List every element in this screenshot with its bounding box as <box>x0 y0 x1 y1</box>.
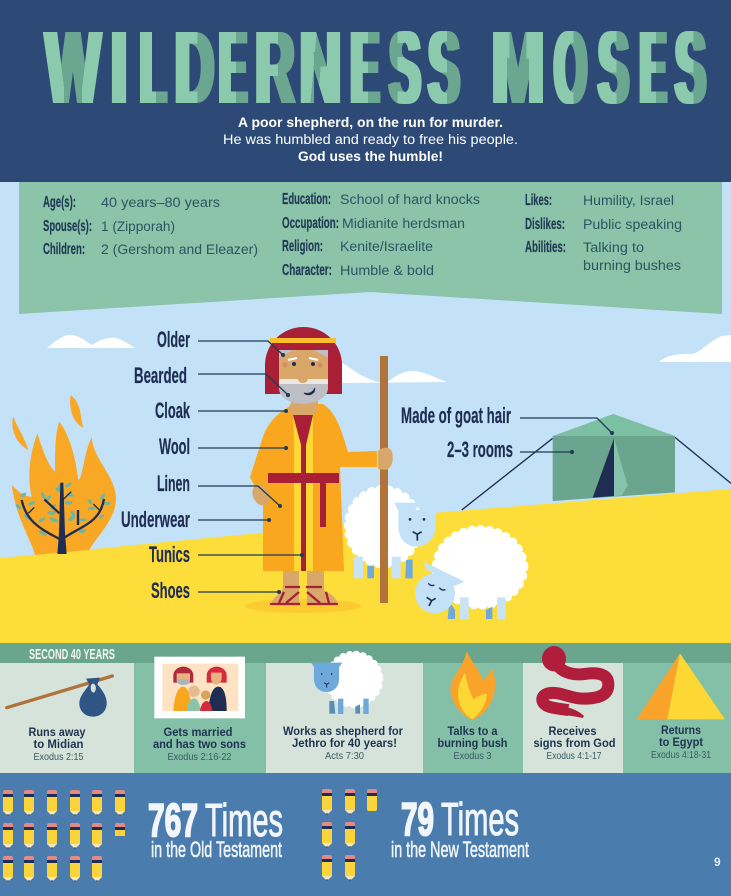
title: D <box>175 11 214 126</box>
callout labels: Moses: Underwear <box>121 507 190 532</box>
event caption: runs away <box>28 725 86 763</box>
sandals <box>270 587 338 604</box>
stat: 767 times: in the Old Testament <box>151 837 282 862</box>
callout labels: Moses: Wool <box>159 434 190 459</box>
Moses figure <box>245 327 393 613</box>
stat: 767 times: 767 <box>148 794 198 846</box>
info panel: Humble & bold <box>340 263 434 278</box>
icon: flame <box>450 651 495 720</box>
callout labels: tent: Made of goat hair <box>401 403 511 428</box>
event caption: runs away: to Midian <box>34 737 84 751</box>
event caption: runs away: Exodus 2:15 <box>34 751 84 763</box>
title: S <box>675 10 706 125</box>
event caption: returns: to Egypt <box>659 735 703 749</box>
robe <box>250 404 377 571</box>
event caption: shepherd: Acts 7:30 <box>325 750 364 762</box>
event caption: signs <box>534 724 616 762</box>
info panel: Children: <box>43 241 85 258</box>
pencils: Old Testament <box>3 790 125 882</box>
info panel: Education: <box>282 191 331 208</box>
callout labels: Moses: Older <box>157 327 190 352</box>
icon: sheep <box>311 655 379 714</box>
info panel <box>19 182 722 314</box>
info panel: 1 (Zipporah) <box>101 219 175 234</box>
title: S <box>598 10 629 125</box>
info panel: Likes: <box>525 192 552 209</box>
stat: 79 times: Times <box>441 793 519 845</box>
info panel: Kenite/Israelite <box>340 239 433 254</box>
event caption: burning bush: Exodus 3 <box>454 750 492 762</box>
info panel: School of hard knocks <box>340 192 480 207</box>
title: R <box>256 11 294 126</box>
intro text: A poor shepherd, on the run for murder. <box>238 115 503 130</box>
info panel: Religion: <box>282 238 323 255</box>
intro text: He was humbled and ready to free his people. <box>223 132 518 147</box>
info panel: burning bushes <box>583 258 681 273</box>
timeline strip: SECOND 40 YEARS <box>29 647 115 663</box>
title: O <box>554 10 587 125</box>
info panel: Humility, Israel <box>583 193 674 208</box>
callout labels: Moses: Shoes <box>151 578 190 603</box>
event caption: gets married <box>153 725 246 763</box>
callout labels: Moses: Cloak <box>155 398 190 423</box>
pencils: New Testament <box>322 789 377 881</box>
sheep: standing <box>349 490 436 578</box>
event caption: returns <box>651 723 711 761</box>
bottom stats band <box>0 773 731 896</box>
head <box>265 327 342 394</box>
event caption: signs: Exodus 4:1-17 <box>546 750 602 762</box>
title: M <box>492 11 544 126</box>
info panel: Spouse(s): <box>43 218 92 235</box>
timeline panels <box>0 663 731 773</box>
belt <box>268 473 339 527</box>
callout labels: Moses: Linen <box>157 471 190 496</box>
event caption: returns: Exodus 4:18-31 <box>651 749 711 761</box>
title: W <box>46 9 100 125</box>
info panel: Abilities: <box>525 239 566 256</box>
title: I <box>111 10 127 125</box>
callout labels: Moses <box>121 327 304 603</box>
event caption: gets married: Exodus 2:16-22 <box>168 751 232 763</box>
stat: 767 times <box>148 794 283 862</box>
callout labels: Moses: Tunics <box>149 542 190 567</box>
icon: family portrait <box>154 657 245 718</box>
event caption: gets married: and has two sons <box>153 737 246 751</box>
info panel: Character: <box>282 262 332 279</box>
event caption: shepherd: Works as shepherd for <box>283 724 403 738</box>
intro text: God uses the humble! <box>298 149 443 164</box>
intro text <box>223 115 518 164</box>
icon: snake <box>542 646 608 718</box>
title: E <box>640 9 666 125</box>
callout labels: tent <box>401 403 614 462</box>
info panel: Midianite herdsman <box>342 216 465 231</box>
icon: pyramid <box>637 653 725 719</box>
neck <box>288 400 318 415</box>
icon: burning bush <box>12 395 116 555</box>
info panel: Dislikes: <box>525 216 565 233</box>
title: E <box>219 10 247 125</box>
sheep: sleeping <box>415 530 523 619</box>
page number: 9 <box>714 855 721 869</box>
info panel: Talking to <box>583 240 644 255</box>
event caption: burning bush <box>438 724 508 762</box>
title: S <box>390 10 420 125</box>
callout labels: tent: 2–3 rooms <box>447 437 513 462</box>
event caption: shepherd: Jethro for 40 years! <box>292 736 397 750</box>
info panel: 40 years–80 years <box>101 195 220 210</box>
title: N <box>300 10 341 125</box>
event caption: burning bush: burning bush <box>438 736 508 750</box>
staff <box>380 356 388 603</box>
legs <box>272 571 337 604</box>
stat: 79 times: in the New Testament <box>391 837 529 862</box>
stat: 79 times: 79 <box>401 793 434 845</box>
clouds <box>47 335 731 383</box>
tent <box>462 414 731 510</box>
title: S <box>429 10 459 125</box>
icon: bundle on stick <box>7 676 112 717</box>
event caption: signs: signs from God <box>534 736 616 750</box>
callout labels: Moses: Bearded <box>134 363 187 388</box>
info panel: Age(s): <box>43 194 76 211</box>
hands <box>249 482 273 508</box>
info panel: Public speaking <box>583 217 682 232</box>
event caption: signs: Receives <box>548 724 597 738</box>
timeline strip <box>0 643 731 664</box>
ground <box>0 489 731 645</box>
title: L <box>140 10 166 125</box>
title: E <box>351 10 379 125</box>
stat: 79 times <box>391 793 529 862</box>
event caption: gets married: Gets married <box>164 725 232 739</box>
info panel: Occupation: <box>282 215 339 232</box>
info panel: 2 (Gershom and Eleazer) <box>101 242 258 257</box>
header band <box>0 0 731 182</box>
event caption: burning bush: Talks to a <box>448 724 498 738</box>
event caption: runs away: Runs away <box>28 725 86 739</box>
event caption: returns: Returns <box>661 723 701 737</box>
event caption: shepherd <box>283 724 403 762</box>
stat: 767 times: Times <box>205 794 283 846</box>
title <box>46 9 706 126</box>
